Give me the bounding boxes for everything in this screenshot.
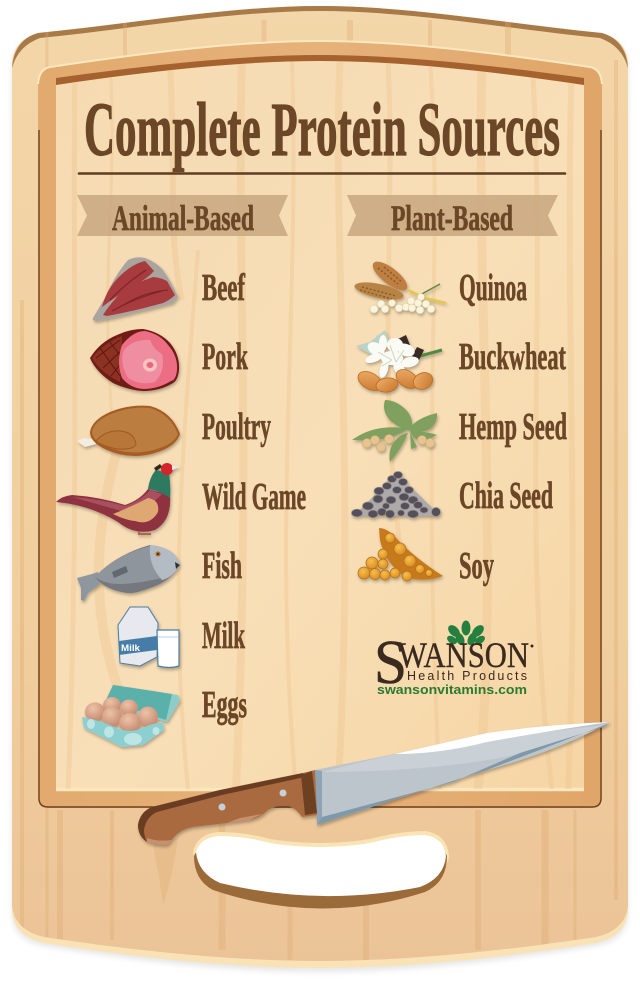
label: chia seed: Chia Seed — [459, 475, 553, 517]
icon: milk carton and glass — [118, 607, 179, 668]
icon: buckwheat — [355, 330, 442, 394]
label: buckwheat: Buckwheat — [459, 336, 566, 378]
label: eggs: Eggs — [202, 684, 247, 726]
banner: animal-based — [77, 195, 288, 238]
banner: animal-based: Animal-Based — [112, 198, 254, 238]
label: beef: Beef — [202, 267, 246, 309]
logo: swanson health products: Health Products — [407, 669, 527, 683]
knife — [138, 722, 610, 845]
icon: beef — [93, 257, 178, 321]
logo: swanson health products — [374, 620, 534, 697]
icon: milk carton and glass: Milk — [121, 643, 141, 653]
icon: poultry — [77, 406, 180, 456]
label: hemp seed: Hemp Seed — [459, 406, 567, 448]
icon: soy — [358, 528, 443, 581]
label: wild game: Wild Game — [202, 476, 306, 518]
icon: egg carton — [82, 685, 180, 747]
icon: pork — [90, 329, 179, 391]
icon: fish — [77, 545, 180, 601]
icon: hemp seed — [352, 400, 437, 462]
label: pork: Pork — [202, 336, 248, 378]
logo: swanson health products: S — [374, 629, 407, 697]
label: fish: Fish — [202, 545, 242, 587]
inset frame — [38, 41, 602, 808]
label: soy: Soy — [459, 545, 494, 587]
label: quinoa: Quinoa — [459, 267, 527, 309]
icon: wild game pheasant — [56, 463, 180, 534]
banner: plant-based — [347, 195, 558, 238]
label: poultry: Poultry — [202, 406, 271, 448]
knife blade — [315, 722, 610, 825]
knife handle — [138, 770, 317, 845]
label: milk: Milk — [202, 615, 245, 657]
icon: quinoa — [353, 257, 446, 314]
logo: swanson health products: WANSON — [398, 635, 529, 675]
icon: chia seed — [352, 472, 440, 518]
handle cutout — [193, 831, 449, 909]
logo: swanson health products: swansonvitamins.com — [377, 683, 527, 697]
banner: plant-based: Plant-Based — [391, 198, 513, 238]
